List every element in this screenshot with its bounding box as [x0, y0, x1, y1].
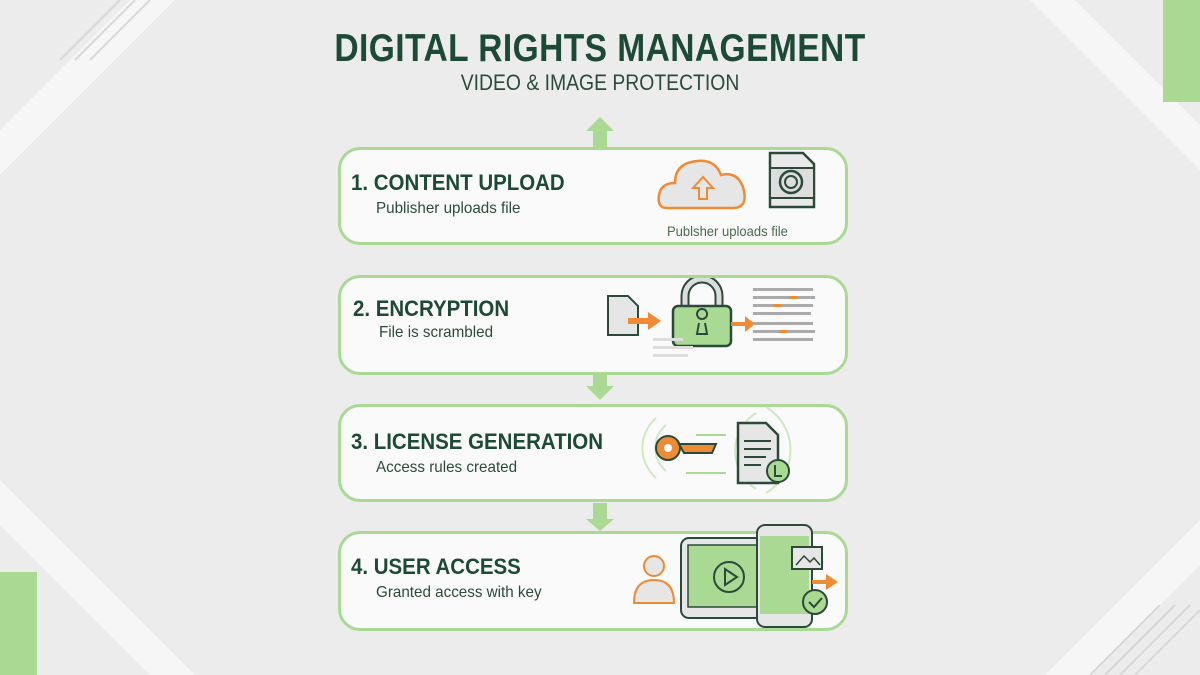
panel: license generation [338, 404, 848, 502]
panel: user access [338, 531, 848, 631]
panel: user access: Granted access with key [376, 584, 542, 601]
panel: content upload: 1. CONTENT UPLOAD [351, 170, 565, 195]
panel: license generation: Access rules created [376, 459, 517, 476]
panel: encryption: 2. ENCRYPTION [353, 296, 509, 321]
connector arrows [586, 117, 614, 531]
panel: user access: 4. USER ACCESS [351, 554, 521, 579]
panel: content upload [338, 147, 848, 245]
caption: Publsher uploads file [667, 223, 788, 239]
icon: cloud upload [657, 160, 746, 210]
icon: user and devices [633, 524, 838, 628]
icon: key and license [642, 406, 792, 494]
title: DIGITAL RIGHTS MANAGEMENT [334, 27, 866, 70]
icon: encryption flow [607, 278, 815, 357]
panel: encryption [338, 275, 848, 375]
panel: encryption: File is scrambled [379, 324, 493, 341]
panel: content upload: Publisher uploads file [376, 200, 520, 217]
subtitle: VIDEO & IMAGE PROTECTION [461, 70, 739, 95]
panel: license generation: 3. LICENSE GENERATION [351, 429, 603, 454]
icon: camera file [768, 152, 816, 208]
